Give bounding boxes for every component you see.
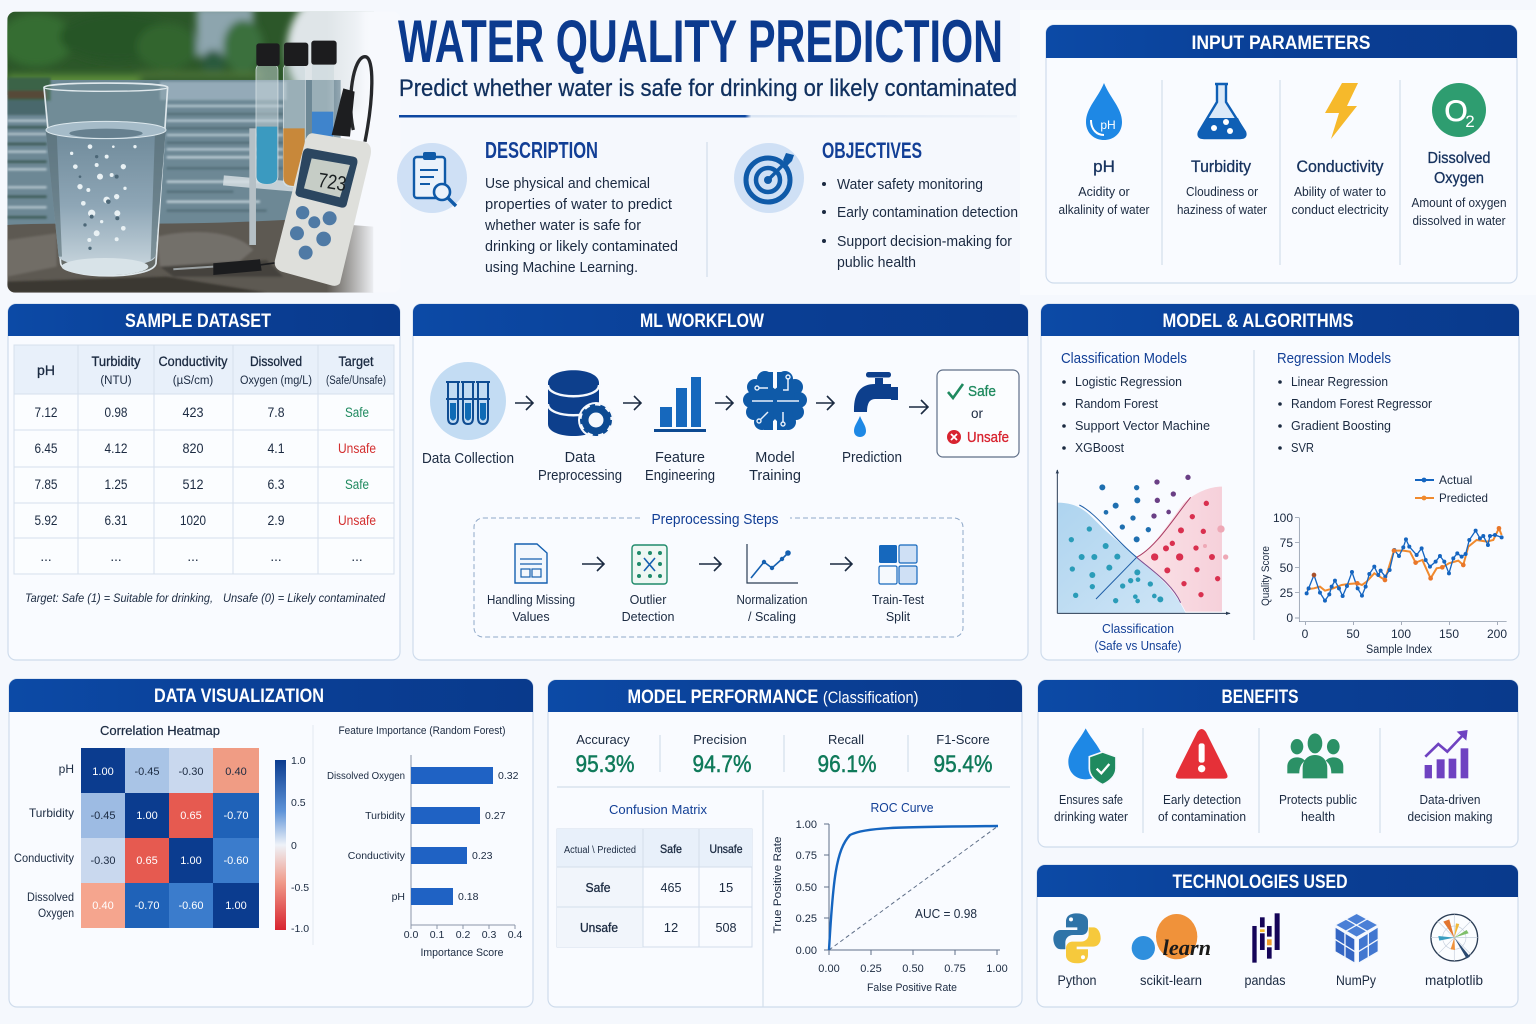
description block: Use physical and chemical: [485, 175, 650, 192]
chart: correlation heatmap: -0.45: [90, 810, 116, 822]
confusion matrix: 465: [660, 880, 682, 895]
step: prediction: [842, 372, 902, 466]
data table: 5.92: [34, 513, 58, 528]
data table: 2.9: [268, 513, 284, 528]
chart legend: [1415, 473, 1488, 505]
parameter: dissolved oxygen: Amount of oxygen: [1412, 196, 1507, 210]
metrics row: Accuracy: [576, 732, 630, 747]
data table: ...: [187, 549, 199, 564]
data table: ...: [110, 549, 122, 564]
chart: feature importance: Feature Importance (Random Forest): [338, 725, 506, 737]
chart: actual vs predicted line: 100: [1391, 627, 1411, 641]
chart: ROC curve: 0.00: [818, 963, 840, 975]
chart: ROC curve: 0.25: [860, 963, 882, 975]
metrics row: [576, 732, 992, 778]
chart: ROC curve: 0.75: [796, 850, 817, 862]
arrow: [623, 396, 641, 410]
metrics row: 95.4%: [934, 751, 992, 778]
parameter: conductivity: Conductivity: [1296, 158, 1384, 176]
data table: 6.31: [104, 513, 128, 528]
data table: pH: [37, 362, 55, 378]
chart: correlation heatmap: -0.60: [178, 900, 204, 912]
arrow: [715, 396, 733, 410]
icon: clipboard with magnifier: [397, 143, 467, 213]
table footnote: Unsafe (0) = Likely contaminated: [223, 591, 385, 605]
data table: 6.45: [34, 441, 58, 456]
chart: correlation heatmap: -0.70: [223, 810, 249, 822]
panel: ML workflow: [413, 304, 1028, 660]
step: feature engineering: Feature: [655, 450, 705, 466]
parameter: dissolved oxygen: O: [1444, 95, 1468, 128]
icon: matplotlib: [1425, 914, 1483, 988]
list: regression models: [1277, 351, 1433, 455]
outcome box: safe or unsafe: Unsafe: [967, 430, 1009, 446]
icon: pandas: pandas: [1244, 973, 1286, 988]
data table: 512: [182, 477, 204, 492]
chart: correlation heatmap: -0.30: [178, 766, 204, 778]
data table: 4.12: [104, 441, 128, 456]
chart: feature importance: Dissolved Oxygen: [327, 770, 405, 782]
chart: correlation heatmap: [14, 723, 309, 935]
benefit: data-driven decisions: [1408, 730, 1493, 824]
chart: feature importance: 0.2: [456, 929, 470, 941]
panel: sample dataset: SAMPLE DATASET: [125, 311, 271, 332]
parameter: pH: Acidity or: [1078, 185, 1130, 199]
parameter: pH: alkalinity of water: [1058, 203, 1150, 217]
list: regression models: Regression Models: [1277, 351, 1391, 367]
parameter: conductivity: conduct electricity: [1292, 203, 1389, 217]
parameter: conductivity: Ability of water to: [1294, 185, 1386, 199]
heatmap colour bar: [275, 755, 309, 935]
table footnote: [25, 591, 385, 605]
icon: scikit-learn: learn: [1163, 935, 1211, 960]
photo: water glass, test tubes and meter by a river: [7, 12, 374, 293]
confusion matrix: 12: [664, 920, 678, 935]
confusion matrix: 15: [719, 880, 733, 895]
objectives block: Water safety monitoring: [837, 177, 983, 193]
chart: feature importance: 0.3: [482, 929, 496, 941]
panel: data visualization: DATA VISUALIZATION: [154, 686, 324, 707]
confusion matrix: Confusion Matrix: [609, 802, 707, 817]
data table: [14, 345, 394, 574]
metrics row: Recall: [828, 732, 864, 747]
metrics row: Precision: [693, 732, 747, 747]
panel: technologies used: TECHNOLOGIES USED: [1172, 872, 1348, 893]
data table: (Safe/Unsafe): [326, 375, 386, 387]
chart: actual vs predicted line: 100: [1273, 511, 1293, 525]
outcome box: safe or unsafe: [937, 370, 1019, 457]
data table: (µS/cm): [173, 375, 213, 387]
chart: correlation heatmap: Oxygen: [38, 906, 74, 920]
chart: actual vs predicted line: 0: [1302, 627, 1309, 641]
step: train-test split: Split: [886, 610, 911, 624]
objectives block: Early contamination detection: [837, 205, 1018, 221]
preprocessing steps box: Preprocessing Steps: [652, 512, 778, 528]
data table: Unsafe: [338, 441, 376, 456]
chart: ROC curve: 0.25: [796, 913, 817, 925]
objectives block: [734, 138, 1018, 271]
chart: correlation heatmap: Conductivity: [14, 851, 74, 865]
objectives block: Support decision-making for: [837, 234, 1012, 250]
chart legend: Predicted: [1439, 491, 1488, 505]
list: classification models: Support Vector Machine: [1075, 418, 1210, 433]
step: data collection: Data Collection: [422, 451, 514, 467]
benefit: safe drinking water: drinking water: [1054, 810, 1128, 824]
benefit: safe drinking water: [1054, 728, 1128, 824]
chart legend: Actual: [1439, 473, 1472, 487]
chart: actual vs predicted line: 25: [1280, 586, 1293, 600]
list: regression models: Linear Regression: [1291, 374, 1388, 389]
chart: correlation heatmap: 1.00: [136, 810, 158, 822]
step: outlier detection: [622, 545, 674, 624]
description block: using Machine Learning.: [485, 259, 638, 276]
confusion matrix: Safe: [586, 880, 610, 895]
title: WATER QUALITY PREDICTION: [398, 8, 1003, 75]
chart: correlation heatmap: -0.60: [223, 855, 249, 867]
chart: actual vs predicted line: 150: [1439, 627, 1459, 641]
panel: ML workflow: ML WORKFLOW: [640, 311, 764, 332]
list: classification models: Logistic Regression: [1075, 374, 1182, 389]
arrow: [515, 396, 533, 410]
chart: classification scatter: Classification: [1102, 621, 1174, 636]
outcome box: safe or unsafe: Safe: [968, 384, 996, 400]
panel: model performance: [548, 680, 1022, 1007]
subtitle: Predict whether water is safe for drinking or likely contaminated: [399, 75, 1017, 102]
arrow: [909, 400, 928, 414]
arrow: [699, 557, 721, 571]
chart: feature importance: Turbidity: [365, 810, 406, 822]
chart: actual vs predicted line: 50: [1280, 561, 1293, 575]
chart: feature importance: 0.4: [508, 929, 522, 941]
parameter: conductivity: [1292, 83, 1389, 217]
parameter: dissolved oxygen: Dissolved: [1428, 150, 1490, 167]
confusion matrix: Actual \ Predicted: [564, 845, 636, 856]
chart: ROC curve: AUC = 0.98: [915, 907, 977, 921]
description block: properties of water to predict: [485, 196, 673, 213]
chart: feature importance: 0.18: [458, 891, 479, 903]
metrics row: 94.7%: [692, 751, 752, 778]
chart: ROC curve: False Positive Rate: [867, 982, 957, 994]
data table: 1020: [180, 513, 206, 528]
parameter: pH: [1058, 83, 1150, 217]
data table: Turbidity: [92, 354, 141, 369]
panel: model and algorithms: [1041, 304, 1519, 660]
chart: ROC curve: 1.00: [796, 819, 817, 831]
heatmap colour bar: 0.5: [291, 797, 306, 809]
chart: feature importance: 0.23: [472, 850, 493, 862]
chart: ROC curve: 0.00: [796, 945, 817, 957]
step: feature engineering: [645, 377, 715, 484]
chart: correlation heatmap: 0.65: [136, 855, 158, 867]
icon: handheld meter: [173, 57, 372, 286]
chart: feature importance: [327, 725, 522, 959]
chart: correlation heatmap: 1.00: [225, 900, 247, 912]
parameter: dissolved oxygen: Oxygen: [1434, 170, 1484, 187]
step: handling missing values: Values: [512, 610, 550, 624]
step: outlier detection: Detection: [622, 610, 674, 624]
description block: DESCRIPTION: [485, 137, 598, 163]
chart: actual vs predicted line: 0: [1286, 611, 1293, 625]
confusion matrix: [557, 802, 752, 947]
step: feature engineering: Engineering: [645, 468, 715, 484]
table footnote: Target: Safe (1) = Suitable for drinking,: [25, 591, 213, 605]
confusion matrix: 508: [716, 920, 736, 935]
chart: correlation heatmap: Correlation Heatmap: [100, 723, 220, 738]
list: regression models: Random Forest Regressor: [1291, 396, 1433, 411]
parameter: turbidity: Cloudiness or: [1186, 185, 1258, 199]
list: regression models: SVR: [1291, 440, 1314, 455]
step: data preprocessing: Preprocessing: [538, 468, 622, 484]
heatmap colour bar: -0.5: [291, 882, 309, 894]
benefit: public health: Protects public: [1279, 793, 1357, 807]
metrics row: 96.1%: [818, 751, 876, 778]
data table: 7.8: [268, 405, 284, 420]
data table: (NTU): [100, 375, 132, 387]
data table: 423: [182, 405, 204, 420]
chart: correlation heatmap: pH: [59, 762, 74, 776]
data table: 7.85: [34, 477, 58, 492]
step: prediction: Prediction: [842, 450, 902, 466]
list: classification models: XGBoost: [1075, 440, 1124, 455]
chart: actual vs predicted line: Sample Index: [1366, 644, 1432, 656]
icon: target with arrow: [734, 143, 804, 213]
chart: ROC curve: 0.50: [796, 882, 817, 894]
panel: model performance: MODEL PERFORMANCE (Classification): [628, 687, 918, 708]
benefit: early detection: [1158, 729, 1246, 824]
metrics row: F1-Score: [936, 732, 990, 747]
parameter: pH: pH: [1100, 118, 1116, 132]
step: data collection: [422, 362, 514, 467]
chart: actual vs predicted line: 200: [1487, 627, 1507, 641]
panel: input parameters: INPUT PARAMETERS: [1192, 33, 1370, 54]
confusion matrix: Unsafe: [710, 842, 743, 856]
data table: 820: [182, 441, 204, 456]
icon: Python: Python: [1058, 973, 1096, 988]
parameter: dissolved oxygen: dissolved in water: [1412, 214, 1506, 228]
chart: correlation heatmap: 0.40: [225, 766, 247, 778]
icon: pandas: [1244, 913, 1286, 988]
data table: 7.12: [34, 405, 58, 420]
chart: ROC curve: [772, 800, 1008, 994]
step: handling missing values: Handling Missing: [487, 593, 575, 607]
parameter: dissolved oxygen: 2: [1465, 112, 1475, 131]
icon: scikit-learn: [1132, 914, 1211, 988]
description block: drinking or likely contaminated: [485, 238, 678, 255]
chart: correlation heatmap: 1.00: [92, 766, 114, 778]
icon: glass of water: [44, 83, 168, 276]
step: normalization / scaling: / Scaling: [748, 610, 796, 624]
step: data preprocessing: Data: [565, 450, 596, 466]
chart: correlation heatmap: 0.65: [180, 810, 202, 822]
chart: feature importance: Importance Score: [420, 947, 504, 959]
panel: sample dataset: [8, 304, 400, 660]
parameter: turbidity: haziness of water: [1177, 203, 1267, 217]
step: normalization / scaling: Normalization: [736, 593, 808, 607]
icon: test tubes in rack: [223, 41, 337, 245]
benefit: public health: health: [1301, 810, 1335, 824]
outcome box: safe or unsafe: or: [971, 406, 984, 421]
chart: feature importance: Conductivity: [348, 850, 406, 862]
data table: Dissolved: [250, 354, 302, 369]
step: outlier detection: Outlier: [630, 593, 666, 607]
chart: actual vs predicted line: 50: [1346, 627, 1360, 641]
icon: scikit-learn: scikit-learn: [1140, 973, 1202, 988]
chart: actual vs predicted line: Quality Score: [1260, 546, 1272, 606]
chart: classification scatter: (Safe vs Unsafe): [1094, 638, 1182, 653]
confusion matrix: Safe: [660, 842, 682, 856]
step: train-test split: [872, 545, 924, 624]
heatmap colour bar: 0: [291, 840, 297, 852]
chart: actual vs predicted line: [1260, 473, 1507, 656]
chart: feature importance: 0.0: [404, 929, 418, 941]
panel: data visualization: [9, 679, 533, 1007]
chart: correlation heatmap: Turbidity: [29, 806, 74, 820]
parameter: turbidity: [1177, 84, 1267, 217]
chart: correlation heatmap: Dissolved: [27, 890, 74, 904]
benefit: data-driven decisions: Data-driven: [1420, 793, 1481, 807]
step: normalization / scaling: [736, 544, 808, 624]
benefit: safe drinking water: Ensures safe: [1059, 793, 1123, 807]
chart: feature importance: pH: [392, 891, 405, 903]
benefit: early detection: of contamination: [1158, 810, 1246, 824]
arrow: [582, 557, 604, 571]
panel: technologies used: [1037, 865, 1518, 1007]
data table: Conductivity: [158, 354, 228, 369]
icon: Python: [1053, 913, 1101, 988]
arrow: [816, 396, 834, 410]
parameter: dissolved oxygen: [1412, 83, 1507, 228]
data table: Safe: [345, 405, 369, 420]
chart: feature importance: 0.27: [485, 810, 506, 822]
step: train-test split: Train-Test: [872, 593, 924, 607]
benefit: public health: [1279, 733, 1357, 824]
chart: actual vs predicted line: 75: [1280, 536, 1293, 550]
list: classification models: [1061, 351, 1210, 455]
chart: ROC curve: ROC Curve: [870, 800, 934, 815]
panel: benefits: [1038, 680, 1518, 847]
description block: whether water is safe for: [484, 217, 641, 234]
step: handling missing values: [487, 544, 575, 624]
benefit: data-driven decisions: decision making: [1408, 810, 1493, 824]
step: model training: [743, 371, 807, 484]
panel: input parameters: [1046, 25, 1517, 283]
description block: [397, 137, 678, 276]
panel: model and algorithms: MODEL & ALGORITHMS: [1162, 311, 1354, 332]
step: model training: Model: [755, 450, 795, 466]
chart: feature importance: 0.1: [430, 929, 444, 941]
data table: ...: [40, 549, 52, 564]
heatmap colour bar: -1.0: [291, 923, 309, 935]
chart: correlation heatmap: -0.30: [90, 855, 116, 867]
chart: correlation heatmap: -0.70: [134, 900, 160, 912]
chart: ROC curve: True Positive Rate: [772, 836, 784, 934]
data table: Oxygen (mg/L): [240, 375, 312, 387]
metrics row: 95.3%: [576, 751, 634, 778]
benefit: early detection: Early detection: [1163, 793, 1241, 807]
chart: ROC curve: 0.50: [902, 963, 924, 975]
parameter: pH: pH: [1093, 157, 1115, 176]
data table: Unsafe: [338, 513, 376, 528]
data table: 1.25: [104, 477, 128, 492]
heatmap colour bar: 1.0: [291, 755, 306, 767]
list: regression models: Gradient Boosting: [1291, 418, 1391, 433]
objectives block: OBJECTIVES: [822, 138, 922, 163]
chart: ROC curve: 1.00: [986, 963, 1008, 975]
icon: matplotlib: matplotlib: [1425, 973, 1483, 988]
icon: NumPy: [1335, 913, 1378, 988]
arrow: [830, 557, 852, 571]
data table: 6.3: [268, 477, 284, 492]
data table: 4.1: [268, 441, 284, 456]
confusion matrix: Unsafe: [580, 920, 618, 935]
preprocessing steps box: [474, 510, 963, 637]
chart: feature importance: 0.32: [498, 770, 519, 782]
panel: benefits: BENEFITS: [1222, 687, 1298, 708]
chart: correlation heatmap: -0.45: [134, 766, 160, 778]
chart: classification scatter: [1056, 469, 1231, 653]
step: model training: Training: [749, 468, 801, 484]
objectives block: public health: [837, 255, 916, 271]
parameter: turbidity: Turbidity: [1191, 158, 1252, 176]
chart: correlation heatmap: 1.00: [180, 855, 202, 867]
data table: ...: [270, 549, 282, 564]
data table: Safe: [345, 477, 369, 492]
step: data preprocessing: [538, 370, 622, 484]
icon: handheld meter: 723: [316, 169, 348, 196]
data table: 0.98: [104, 405, 128, 420]
data table: Target: [338, 354, 374, 369]
chart: correlation heatmap: 0.40: [92, 900, 114, 912]
list: classification models: Random Forest: [1075, 396, 1158, 411]
chart: ROC curve: 0.75: [944, 963, 966, 975]
icon: NumPy: NumPy: [1336, 973, 1376, 988]
data table: ...: [351, 549, 363, 564]
list: classification models: Classification Models: [1061, 351, 1187, 367]
